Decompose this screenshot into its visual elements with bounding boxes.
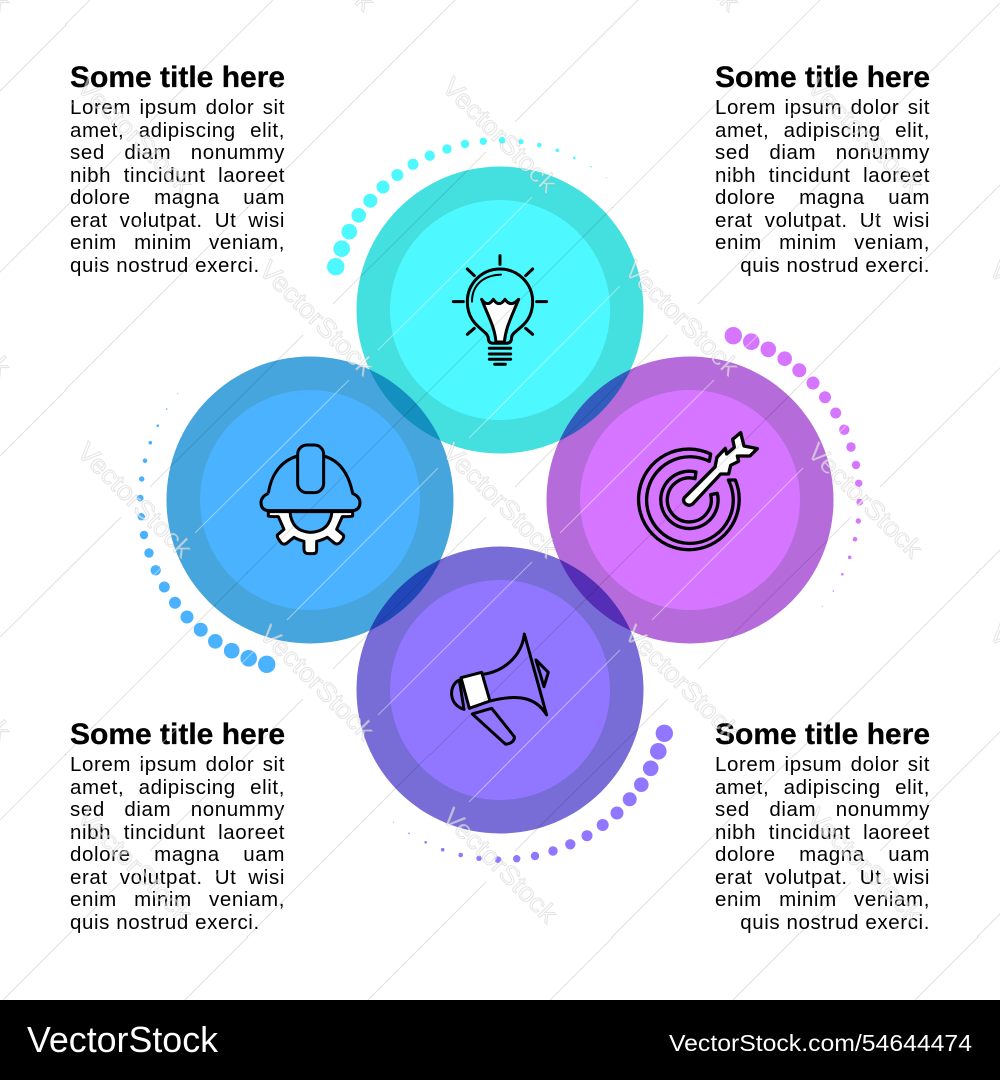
footer band: [0, 1000, 1000, 1080]
body text: Lorem ipsum dolor sit: [70, 96, 285, 119]
heading: Some title here: [715, 61, 930, 94]
icon: megaphone: [452, 634, 548, 744]
body text: nibh tincidunt laoreet: [715, 821, 930, 844]
body text: sed diam nonummy: [715, 798, 930, 821]
body text: Lorem ipsum dolor sit: [715, 96, 930, 119]
dotted arc: violet: [393, 725, 673, 863]
body text: sed diam nonummy: [70, 141, 285, 164]
body text: [715, 96, 930, 277]
body text: sed diam nonummy: [70, 798, 285, 821]
body text: erat volutpat. Ut wisi: [70, 866, 285, 889]
heading: Some title here: [70, 61, 285, 94]
body text: enim minim veniam,: [70, 231, 285, 254]
body text: nibh tincidunt laoreet: [70, 164, 285, 187]
text block: top right: [715, 61, 930, 277]
body text: [70, 753, 285, 934]
circle: pink inner: [580, 390, 800, 610]
body text: dolore magna uam: [715, 843, 930, 866]
body text: erat volutpat. Ut wisi: [715, 209, 930, 232]
circle: pink outer: [546, 356, 834, 644]
circle: blue inner: [200, 390, 420, 610]
icon: light bulb: [453, 256, 547, 364]
body text: amet, adipiscing elit,: [715, 119, 930, 142]
circle: violet inner: [390, 580, 610, 800]
body text: dolore magna uam: [70, 186, 285, 209]
dotted arc: blue: [137, 393, 275, 673]
icon: target with arrow: [639, 433, 757, 550]
dotted arc: pink: [725, 327, 863, 607]
body text: sed diam nonummy: [715, 141, 930, 164]
body text: Lorem ipsum dolor sit: [715, 753, 930, 776]
footer image id: VectorStock.com/54644474: [669, 1030, 972, 1056]
body text: amet, adipiscing elit,: [715, 776, 930, 799]
body text: erat volutpat. Ut wisi: [70, 209, 285, 232]
text block: top left: [70, 61, 285, 277]
body text: amet, adipiscing elit,: [70, 776, 285, 799]
body text: erat volutpat. Ut wisi: [715, 866, 930, 889]
circle: cyan inner: [390, 200, 610, 420]
body text: enim minim veniam,: [715, 231, 930, 254]
body text: enim minim veniam,: [70, 888, 285, 911]
footer logo text: VectorStock: [27, 1019, 219, 1060]
body text: quis nostrud exerci.: [70, 254, 260, 277]
body text: quis nostrud exerci.: [740, 911, 930, 934]
text block: bottom right: [715, 718, 930, 934]
dotted arc: cyan: [327, 137, 607, 275]
heading: Some title here: [715, 718, 930, 751]
text block: bottom left: [70, 718, 285, 934]
heading: Some title here: [70, 718, 285, 751]
body text: [70, 96, 285, 277]
body text: Lorem ipsum dolor sit: [70, 753, 285, 776]
icon: helmet with gear: [261, 445, 360, 554]
body text: nibh tincidunt laoreet: [70, 821, 285, 844]
body text: quis nostrud exerci.: [740, 254, 930, 277]
body text: [715, 753, 930, 934]
body text: nibh tincidunt laoreet: [715, 164, 930, 187]
circle: blue outer: [166, 356, 454, 644]
body text: enim minim veniam,: [715, 888, 930, 911]
body text: amet, adipiscing elit,: [70, 119, 285, 142]
circle: violet outer: [356, 546, 644, 834]
circle: cyan outer: [356, 166, 644, 454]
body text: dolore magna uam: [715, 186, 930, 209]
body text: quis nostrud exerci.: [70, 911, 260, 934]
body text: dolore magna uam: [70, 843, 285, 866]
